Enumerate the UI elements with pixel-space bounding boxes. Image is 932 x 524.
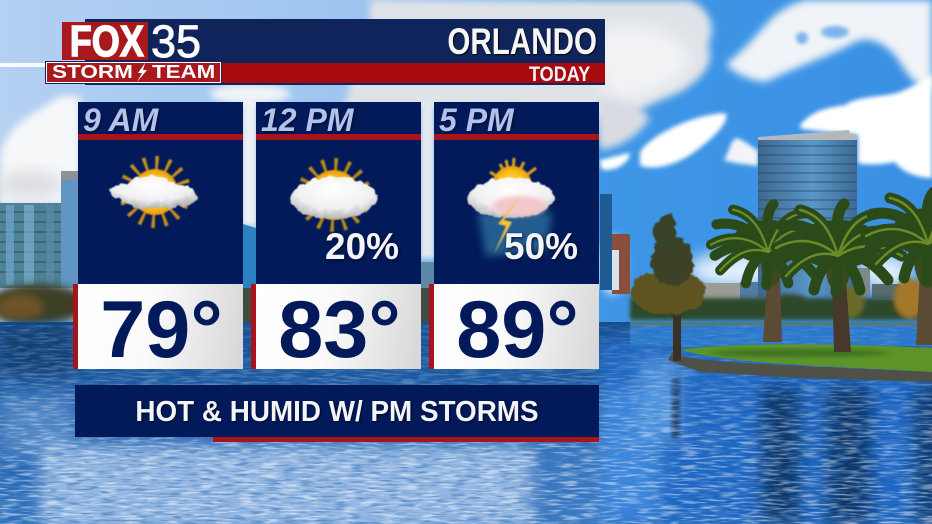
header rule xyxy=(78,134,243,140)
panel: 5 PM xyxy=(429,102,599,375)
summary red underline xyxy=(213,437,599,442)
clouds xyxy=(0,0,932,295)
right skyline xyxy=(600,194,902,301)
water ripples xyxy=(0,325,932,524)
temperature: 89 xyxy=(434,284,599,369)
island xyxy=(668,344,932,382)
panel head: 9 AM xyxy=(78,102,243,284)
palm trees xyxy=(711,192,932,352)
time label: 12 PM xyxy=(261,102,353,138)
header red strip xyxy=(150,63,605,83)
storm wordmark: STORM xyxy=(52,62,133,82)
icon: thunderstorm xyxy=(466,157,556,260)
temperature stripe xyxy=(73,284,78,369)
channel number: 35 xyxy=(151,16,201,67)
header rule xyxy=(256,134,421,140)
icon: cloud with sun xyxy=(289,157,378,233)
tower xyxy=(758,130,857,297)
logo: FOX 35 xyxy=(62,16,201,67)
temperature: 79: 79° xyxy=(100,285,223,375)
day label: TODAY xyxy=(529,63,590,86)
precipitation chance: 50% xyxy=(504,226,578,267)
header rule xyxy=(434,134,599,140)
temperature stripe xyxy=(429,284,434,369)
header banner xyxy=(85,19,605,85)
temperature: 83: 83° xyxy=(278,285,401,375)
FOX red tile xyxy=(62,22,148,60)
panel: 9 AM xyxy=(73,102,243,375)
time label: 5 PM xyxy=(439,102,514,138)
temperature: 89: 89° xyxy=(456,285,579,375)
cypress tree xyxy=(630,214,706,361)
temperature stripe xyxy=(251,284,256,369)
far tree line xyxy=(630,278,932,320)
location title: ORLANDO xyxy=(447,21,597,62)
team wordmark: TEAM xyxy=(152,62,215,82)
forecast summary bar xyxy=(75,385,599,442)
summary background xyxy=(75,385,599,437)
temperature: 83 xyxy=(256,284,421,369)
left skyline xyxy=(0,171,434,328)
panel head: 12 PM xyxy=(256,102,421,284)
water xyxy=(0,322,932,524)
panel: 12 PM xyxy=(251,102,421,375)
white rule left of logo xyxy=(0,63,48,67)
icon: sun behind cloud xyxy=(108,155,199,229)
FOX wordmark: FOX xyxy=(70,17,144,66)
panel head: 5 PM xyxy=(434,102,599,284)
time label: 9 AM xyxy=(83,102,158,138)
logo: Storm Team xyxy=(46,62,221,83)
temperature: 79 xyxy=(78,284,243,369)
summary text: HOT & HUMID W/ PM STORMS xyxy=(135,396,539,428)
precipitation chance: 20% xyxy=(325,226,399,267)
icon: lightning bolt xyxy=(137,63,147,82)
